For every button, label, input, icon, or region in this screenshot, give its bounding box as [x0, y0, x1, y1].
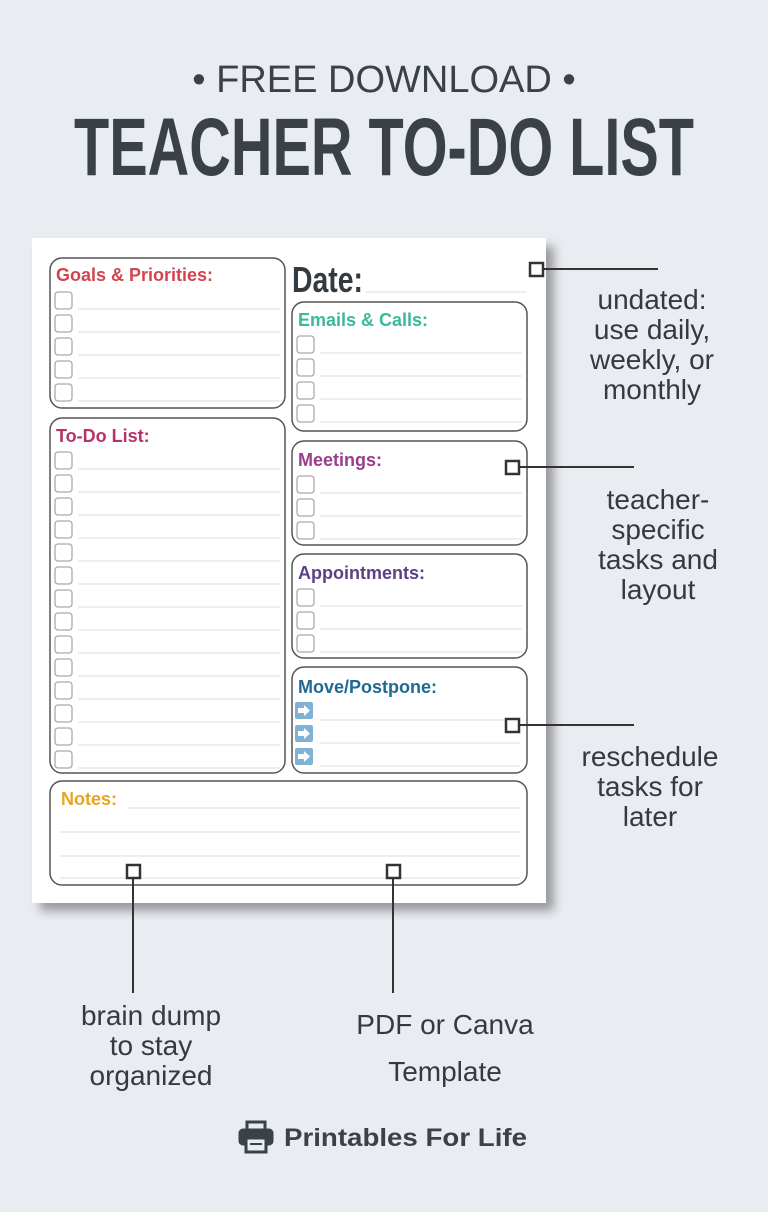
callout: pdf or canva [356, 865, 534, 1087]
panel: move/postpone: Move/Postpone: [298, 677, 437, 697]
callout: teacher-specific [506, 461, 718, 605]
panel: meetings [292, 441, 527, 545]
callout: teacher-specific: layout [621, 574, 696, 605]
panel: goals & priorities [50, 258, 285, 408]
heading: date: Date: [292, 259, 363, 300]
callout: pdf or canva: Template [388, 1056, 502, 1087]
panel: emails & calls [292, 302, 527, 431]
footer: printables for life: Printables For Life [284, 1124, 527, 1152]
callout: reschedule: reschedule [582, 741, 718, 772]
panel: move/postpone [292, 667, 527, 773]
callout: undated: use daily, [594, 314, 710, 345]
callout: teacher-specific: teacher- [607, 484, 709, 515]
panel: appointments: Appointments: [298, 563, 425, 583]
callout: teacher-specific: specific [611, 514, 705, 545]
callout: reschedule [506, 719, 718, 832]
callout: undated: monthly [603, 374, 701, 405]
callout: undated: weekly, or [589, 344, 714, 375]
panel: appointments [292, 554, 527, 658]
panel: to-do list: To-Do List: [56, 426, 150, 446]
title: free download: • FREE DOWNLOAD • [192, 59, 576, 101]
icon: printer [240, 1122, 272, 1152]
panel: notes: Notes: [61, 789, 117, 809]
callout: reschedule: tasks for [597, 771, 703, 802]
callout: pdf or canva: PDF or Canva [356, 1009, 534, 1040]
callout: reschedule: later [623, 801, 677, 832]
callout: undated: undated: [598, 284, 706, 315]
callout: brain dump: organized [90, 1060, 212, 1091]
callout: brain dump: brain dump [81, 1000, 221, 1031]
callout: brain dump: to stay [110, 1030, 192, 1061]
panel: meetings: Meetings: [298, 450, 382, 470]
callout: teacher-specific: tasks and [598, 544, 718, 575]
callout: brain dump [81, 865, 221, 1091]
panel: emails & calls: Emails & Calls: [298, 310, 428, 330]
panel: goals & priorities: Goals & Priorities: [56, 265, 213, 285]
panel: notes [50, 781, 527, 885]
panel: to-do list [50, 418, 285, 773]
callout: undated [530, 263, 714, 405]
panel: planner sheet [32, 238, 546, 903]
